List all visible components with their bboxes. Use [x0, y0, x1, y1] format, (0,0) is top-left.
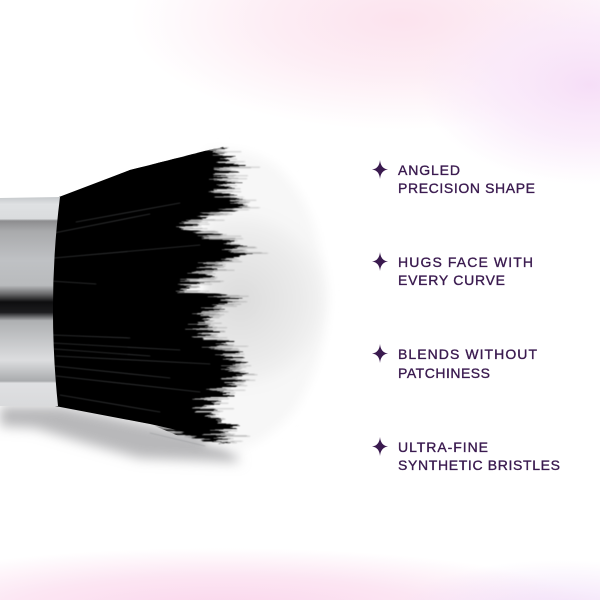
white bristle tips [205, 149, 328, 452]
icon: sparkle [372, 252, 388, 271]
brush illustration [0, 147, 328, 462]
feature: hugs face with every curve: EVERY CURVE [398, 272, 505, 288]
icon: sparkle [372, 437, 388, 456]
black bristle core [55, 155, 190, 433]
feature: hugs face with every curve: HUGS FACE WITH [398, 254, 533, 270]
feature: angled precision shape: PRECISION SHAPE [398, 180, 535, 196]
feature: angled precision shape [372, 160, 535, 196]
feature: ultra-fine synthetic bristles: SYNTHETIC BRISTLES [398, 457, 560, 473]
black bristle body [30, 147, 241, 444]
bristle highlights [50, 203, 210, 446]
feature: blends without patchiness: PATCHINESS [398, 365, 490, 381]
black bristle fringe [129, 146, 268, 444]
brush ferrule [0, 197, 60, 406]
feature: angled precision shape: ANGLED [398, 162, 460, 178]
brush shadow [0, 406, 240, 462]
feature: ultra-fine synthetic bristles [372, 437, 560, 473]
feature list [372, 160, 560, 473]
icon: sparkle [372, 344, 388, 363]
feature: blends without patchiness: BLENDS WITHOUT [398, 346, 537, 362]
feature: blends without patchiness [372, 344, 537, 381]
feature: hugs face with every curve [372, 252, 533, 288]
feature: ultra-fine synthetic bristles: ULTRA-FINE [398, 439, 488, 455]
icon: sparkle [372, 160, 388, 179]
